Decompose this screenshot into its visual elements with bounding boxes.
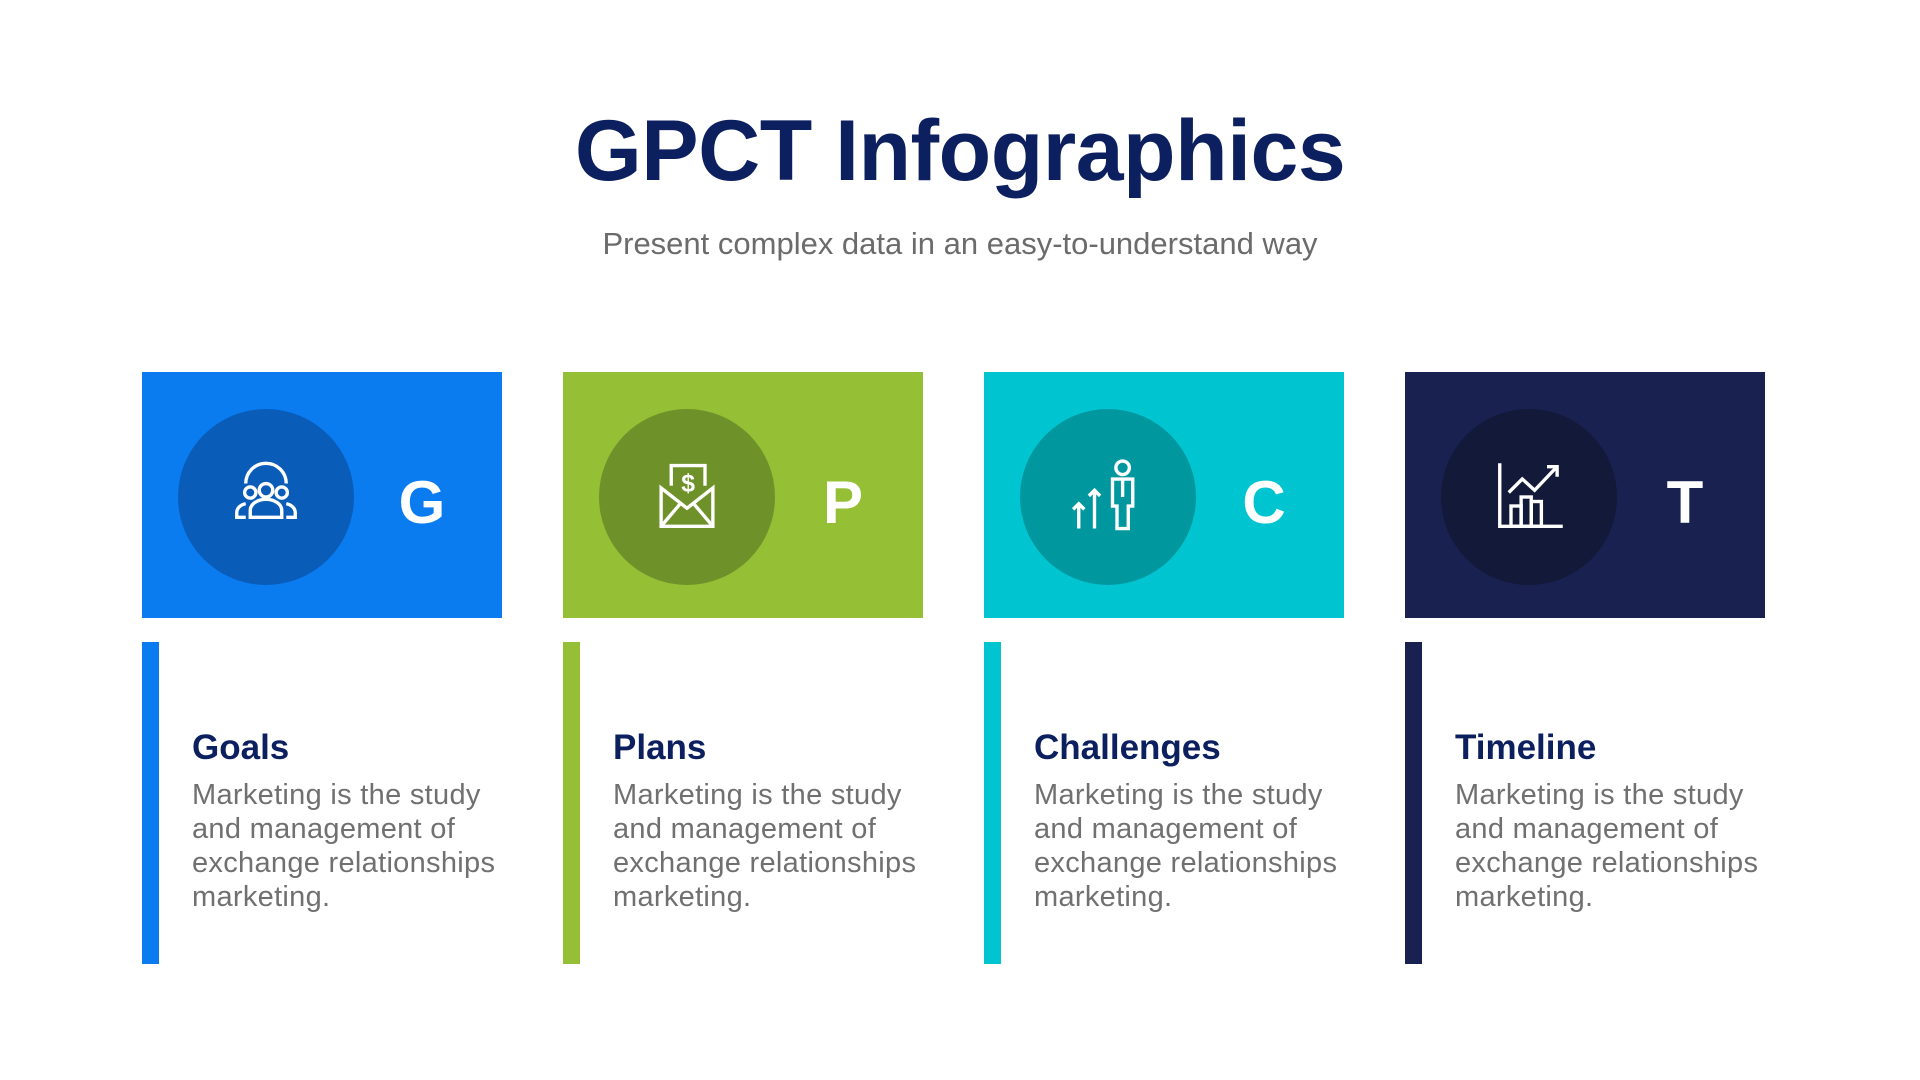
subtitle: Present complex data in an easy-to-understand way: [602, 226, 1318, 261]
text block: plans: exchange relationships: [613, 847, 916, 879]
text block: challenges: [1034, 728, 1337, 913]
text block: plans: Plans: [613, 728, 706, 767]
icon: envelope: $: [681, 470, 695, 497]
letter P: P: [823, 469, 863, 536]
text block: challenges: and management of: [1034, 813, 1297, 845]
text block: timeline: Timeline: [1455, 728, 1596, 767]
text block: timeline: [1455, 728, 1758, 913]
bar: challenges: [984, 642, 1001, 964]
title: GPCT Infographics: [575, 103, 1345, 199]
bar: plans: [563, 642, 580, 964]
panel: goals box: [142, 372, 502, 618]
text block: goals: exchange relationships: [192, 847, 495, 879]
text block: challenges: Marketing is the study: [1034, 779, 1323, 811]
panel: plans box: [563, 372, 923, 618]
text block: timeline: Marketing is the study: [1455, 779, 1744, 811]
text block: goals: Goals: [192, 728, 289, 767]
icon: person growth: [1020, 409, 1196, 585]
panel: timeline box: [1405, 372, 1765, 618]
text block: goals: and management of: [192, 813, 455, 845]
icon: chart: [1441, 409, 1617, 585]
text block: plans: marketing.: [613, 881, 751, 913]
panel: challenges box: [984, 372, 1344, 618]
text block: challenges: marketing.: [1034, 881, 1172, 913]
text block: goals: Marketing is the study: [192, 779, 481, 811]
text block: timeline: marketing.: [1455, 881, 1593, 913]
text block: challenges: Challenges: [1034, 728, 1221, 767]
icon: people: [178, 409, 354, 585]
bar: timeline: [1405, 642, 1422, 964]
text block: plans: Marketing is the study: [613, 779, 902, 811]
bar: goals: [142, 642, 159, 964]
letter T: T: [1667, 469, 1703, 536]
text block: plans: [613, 728, 916, 913]
icon: envelope: [599, 409, 775, 585]
letter G: G: [399, 469, 445, 536]
text block: plans: and management of: [613, 813, 876, 845]
letter C: C: [1242, 469, 1286, 536]
text block: challenges: exchange relationships: [1034, 847, 1337, 879]
text block: goals: marketing.: [192, 881, 330, 913]
text block: timeline: and management of: [1455, 813, 1718, 845]
text block: goals: [192, 728, 495, 913]
text block: timeline: exchange relationships: [1455, 847, 1758, 879]
